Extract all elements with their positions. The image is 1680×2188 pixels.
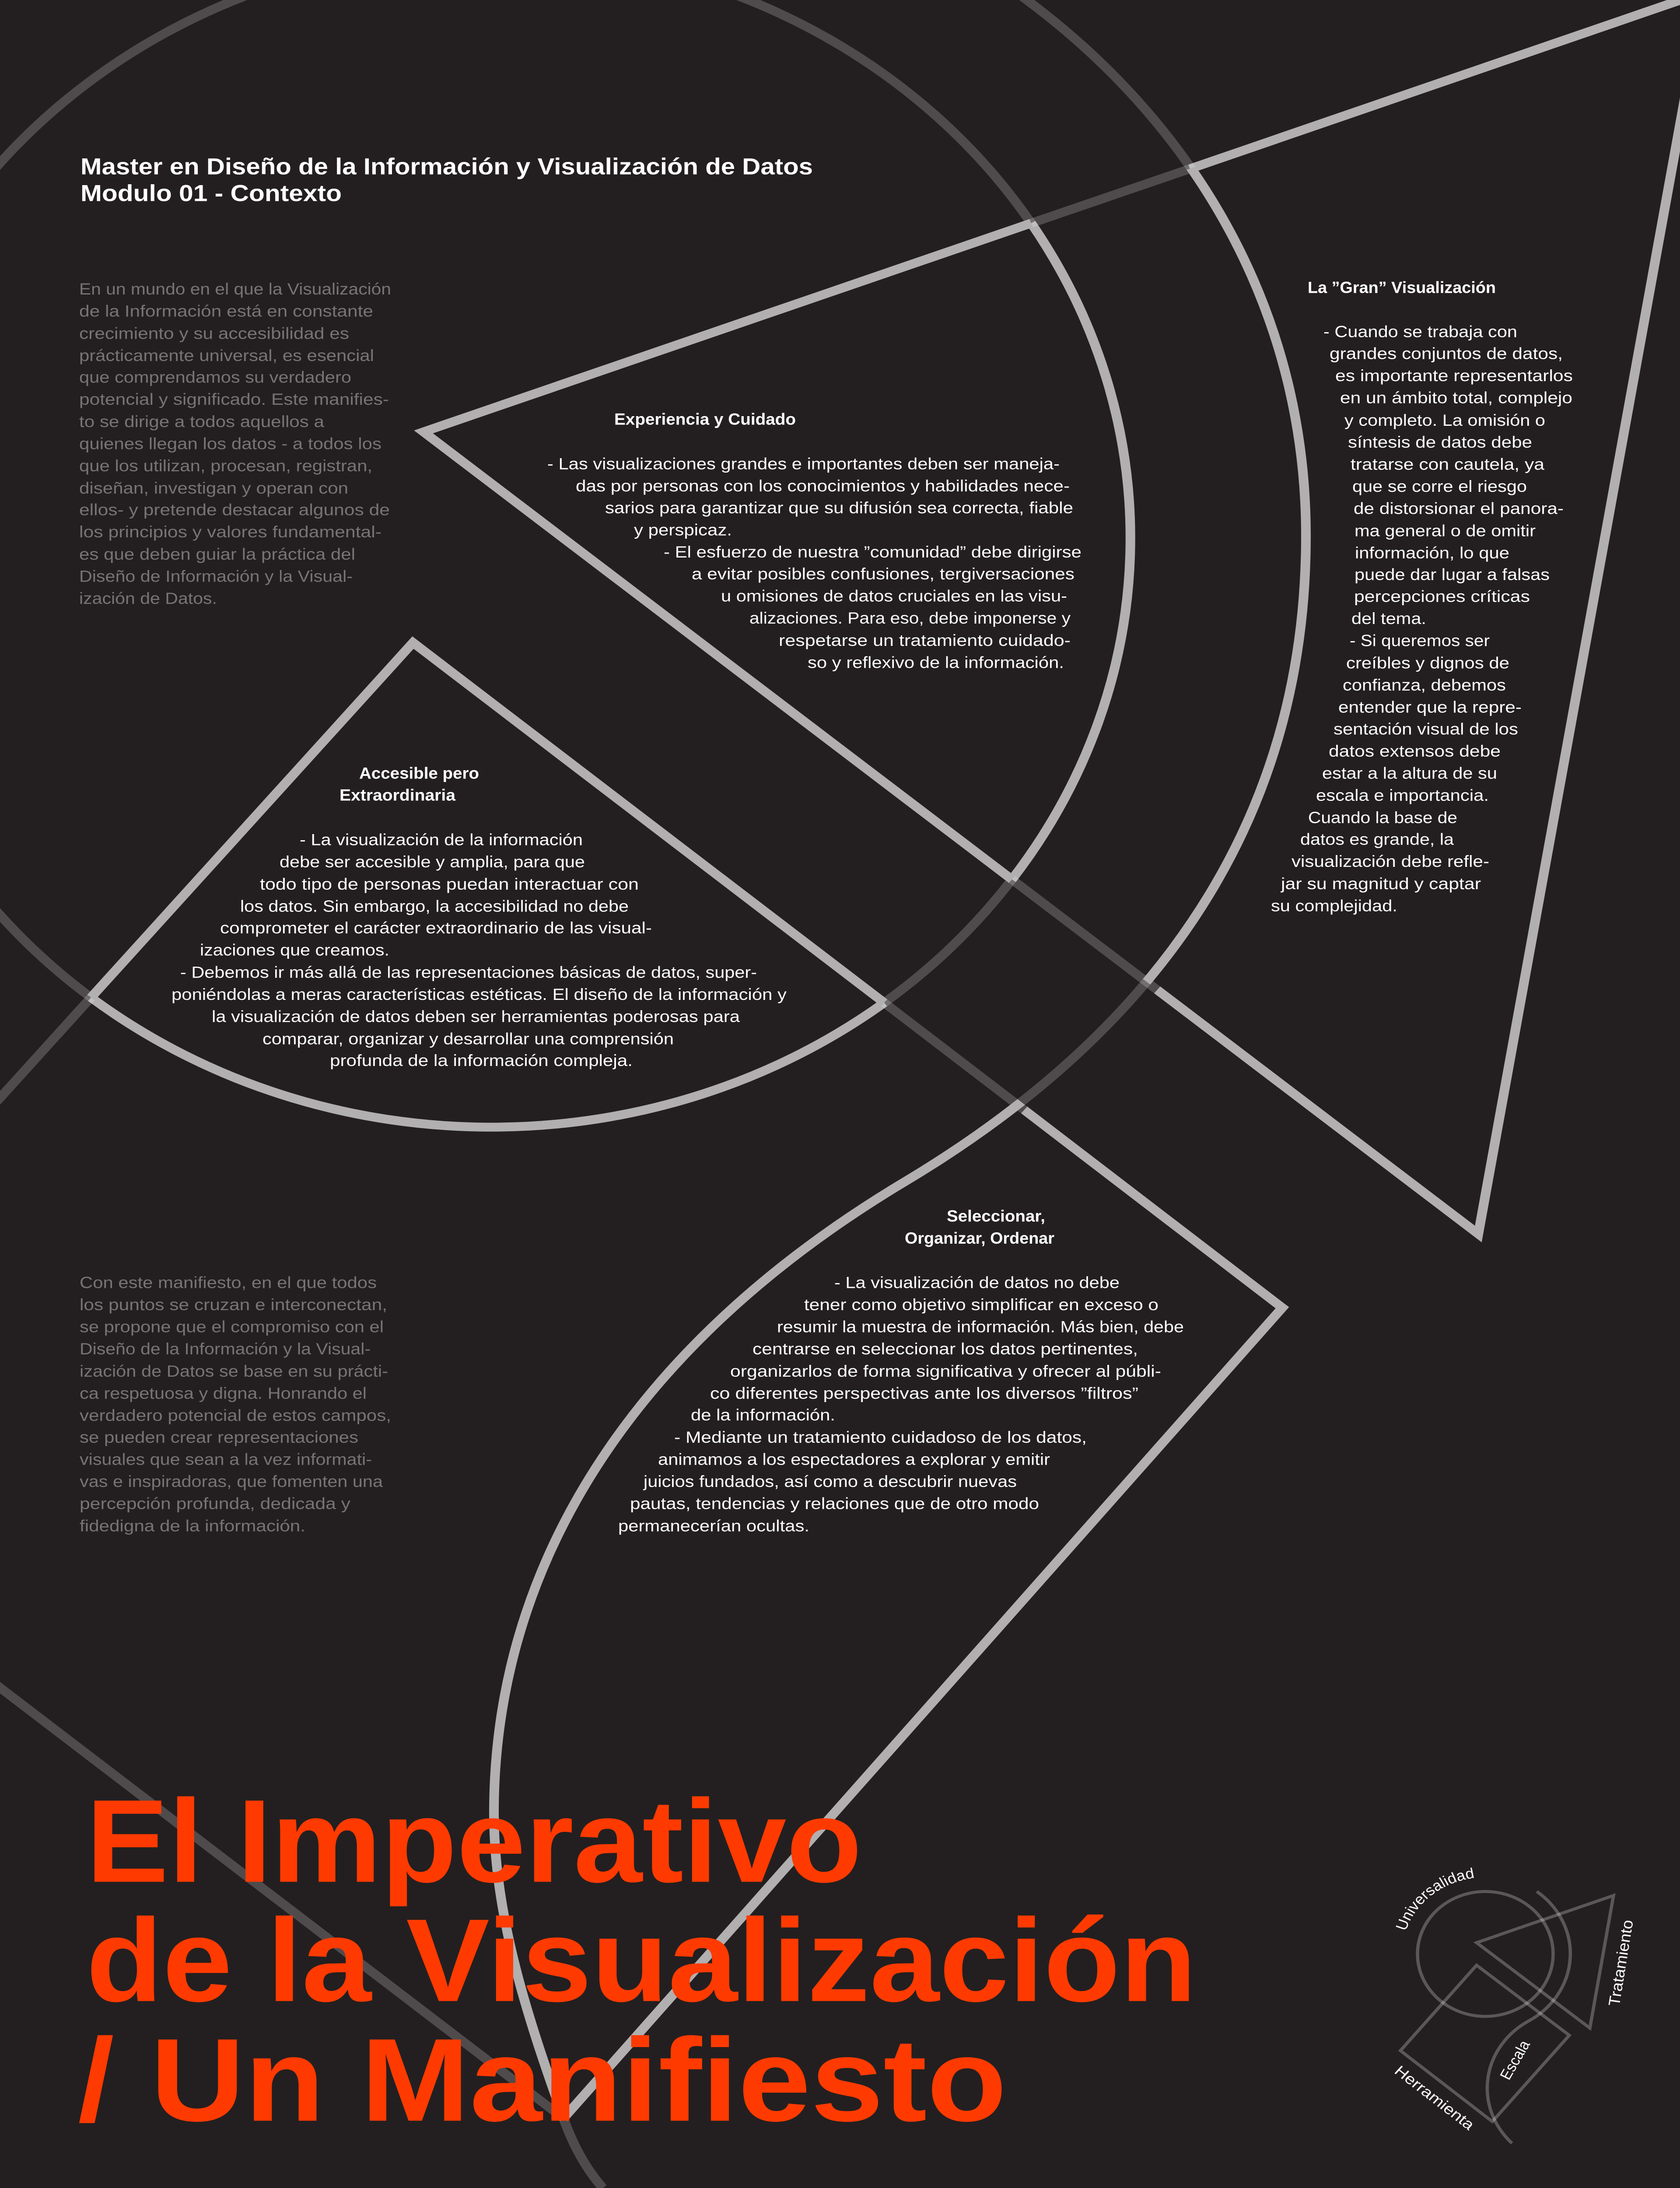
body text: La Gran Visualización: escala e importancia. (1316, 787, 1489, 805)
body text: La Gran Visualización: y completo. La omisión o (1344, 412, 1545, 430)
text block: conclusion: se propone que el compromiso con el (80, 1318, 384, 1336)
icon: small diagram of the four shapes with labels (1391, 1865, 1637, 2143)
text block: conclusion: ca respetuosa y digna. Honrando el (80, 1385, 367, 1403)
text block: introduction: ización de Datos. (79, 589, 217, 608)
body text: La Gran Visualización: de distorsionar el panora- (1354, 500, 1564, 518)
body text: Experiencia y Cuidado: alizaciones. Para eso, debe imponerse y (749, 610, 1071, 628)
body text: La Gran Visualización: percepciones críticas (1354, 588, 1530, 606)
heading: Seleccionar, Organizar, Ordenar: Seleccionar, (947, 1207, 1045, 1225)
body text: Experiencia y Cuidado: y perspicaz. (634, 521, 732, 539)
text block: introduction: que comprendamos su verdadero (79, 368, 351, 386)
text block: conclusion (80, 1274, 391, 1535)
heading: Accesible pero Extraordinaria: Extraordinaria (340, 786, 456, 804)
text block: conclusion: Diseño de la Información y la Visual- (80, 1340, 371, 1358)
body text: Experiencia y Cuidado: respetarse un tratamiento cuidado- (779, 631, 1071, 649)
body text: Accesible pero Extraordinaria: izaciones que creamos. (200, 941, 389, 959)
header: programme title (80, 154, 813, 206)
body text: Seleccionar, Organizar, Ordenar: resumir la muestra de información. Más bien, debe (777, 1318, 1184, 1336)
body text: La Gran Visualización: estar a la altura de su (1322, 764, 1497, 782)
title (78, 1775, 1197, 2146)
body text: La Gran Visualización: que se corre el riesgo (1352, 478, 1527, 496)
body text: Seleccionar, Organizar, Ordenar: - Mediante un tratamiento cuidadoso de los datos, (674, 1428, 1087, 1446)
body text: La Gran Visualización: es importante representarlos (1335, 367, 1573, 385)
header: programme title: Master en Diseño de la Información y Visualización de Datos (80, 154, 813, 179)
body text: La Gran Visualización: datos es grande, la (1300, 831, 1454, 849)
header: programme title: Modulo 01 - Contexto (80, 180, 342, 206)
text block: introduction: En un mundo en el que la Visualización (79, 280, 391, 298)
shape: large circle sector (0, 0, 1130, 1127)
heading: Accesible pero Extraordinaria: Accesible pero (359, 764, 479, 782)
text block: introduction: diseñan, investigan y operan con (79, 479, 348, 497)
icon shape: triangle (1477, 1896, 1614, 2028)
body text: Experiencia y Cuidado: u omisiones de datos cruciales en las visu- (721, 587, 1067, 605)
text block: conclusion: ización de Datos se base en su prácti- (80, 1362, 388, 1380)
text block: introduction: potencial y significado. Este manifies- (79, 391, 389, 409)
body text: La Gran Visualización: - Cuando se trabaja con (1323, 323, 1517, 341)
body text: Accesible pero Extraordinaria: los datos. Sin embargo, la accesibilidad no debe (240, 898, 629, 915)
shape: large square (0, 642, 1282, 2118)
body text: Seleccionar, Organizar, Ordenar: organizarlos de forma significativa y ofrecer al públi- (730, 1362, 1161, 1380)
icon shape: circle (1418, 1891, 1553, 2016)
body text: Seleccionar, Organizar, Ordenar: co diferentes perspectivas ante los diversos ”filtros” (710, 1385, 1138, 1403)
body text: Seleccionar, Organizar, Ordenar: tener como objetivo simplificar en exceso o (804, 1296, 1158, 1314)
panel: La Gran Visualización (1271, 279, 1573, 915)
title: El Imperativo (86, 1775, 862, 1907)
body text: La Gran Visualización: en un ámbito total, complejo (1340, 389, 1572, 407)
text block: introduction: que los utilizan, procesan, registran, (79, 457, 372, 475)
text block: introduction: quienes llegan los datos - a todos los (79, 435, 382, 453)
body text: Accesible pero Extraordinaria: - La visualización de la información (300, 831, 583, 849)
body text: Experiencia y Cuidado: so y reflexivo de la información. (808, 654, 1064, 672)
icon shape: square (1400, 1965, 1569, 2121)
body text: La Gran Visualización: del tema. (1351, 610, 1426, 628)
text block: conclusion: percepción profunda, dedicada y (80, 1495, 351, 1513)
text block: introduction: to se dirige a todos aquellos a (79, 413, 325, 431)
text block: introduction: de la Información está en constante (79, 302, 373, 320)
panel: Experiencia y Cuidado (547, 410, 1082, 672)
body text: Accesible pero Extraordinaria: - Debemos ir más allá de las representaciones básicas de datos, super- (180, 964, 757, 982)
label: Tratamiento: Tratamiento (1606, 1919, 1637, 2007)
body text: Accesible pero Extraordinaria: debe ser accesible y amplia, para que (280, 853, 585, 871)
body text: La Gran Visualización: grandes conjuntos de datos, (1330, 345, 1563, 363)
body text: Seleccionar, Organizar, Ordenar (618, 1274, 1184, 1535)
body text: La Gran Visualización: sentación visual de los (1334, 720, 1518, 738)
icon shape: S curve (1487, 1891, 1570, 2143)
text block: introduction: Diseño de Información y la Visual- (79, 568, 353, 586)
body text: Seleccionar, Organizar, Ordenar: centrarse en seleccionar los datos pertinentes, (752, 1340, 1138, 1358)
label: Escala: Escala (1497, 2037, 1534, 2083)
shape: large triangle (424, 0, 1680, 1234)
body text: Accesible pero Extraordinaria: profunda de la información compleja. (330, 1052, 633, 1070)
body text: La Gran Visualización: entender que la repre- (1338, 698, 1522, 716)
body text: Accesible pero Extraordinaria: comparar, organizar y desarrollar una comprensión (262, 1030, 674, 1048)
body text: Seleccionar, Organizar, Ordenar: juicios fundados, así como a descubrir nuevas (643, 1473, 1017, 1491)
text block: introduction (79, 280, 391, 608)
body text: Seleccionar, Organizar, Ordenar: animamos a los espectadores a explorar y emitir (658, 1451, 1050, 1469)
body text: La Gran Visualización: síntesis de datos debe (1348, 433, 1532, 451)
text block: conclusion: verdadero potencial de estos campos, (80, 1407, 391, 1425)
body text: Accesible pero Extraordinaria: comprometer el carácter extraordinario de las visual- (220, 919, 652, 937)
body text: Experiencia y Cuidado: sarios para garantizar que su difusión sea correcta, fiable (605, 499, 1073, 517)
body text: La Gran Visualización: puede dar lugar a falsas (1354, 566, 1550, 584)
label: Universalidad: Universalidad (1393, 1865, 1476, 1932)
text block: introduction: ellos- y pretende destacar algunos de (79, 501, 390, 519)
body text: La Gran Visualización: Cuando la base de (1308, 809, 1457, 827)
text block: introduction: crecimiento y su accesibilidad es (79, 325, 349, 343)
body text: Accesible pero Extraordinaria: todo tipo de personas puedan interactuar con (260, 875, 639, 893)
panel: Seleccionar, Organizar, Ordenar (618, 1207, 1184, 1535)
body text: Experiencia y Cuidado: - El esfuerzo de nuestra ”comunidad” debe dirigirse (664, 543, 1082, 561)
text block: introduction: los principios y valores fundamental- (79, 523, 382, 541)
heading: Seleccionar, Organizar, Ordenar: Organizar, Ordenar (905, 1229, 1054, 1248)
title: / Un Manifiesto (78, 2014, 1007, 2146)
body text: La Gran Visualización: visualización debe refle- (1292, 853, 1489, 871)
heading: Accesible pero Extraordinaria (340, 764, 479, 804)
panel: Accesible pero Extraordinaria (172, 764, 787, 1070)
text block: introduction: prácticamente universal, es esencial (79, 347, 374, 365)
text block: conclusion: vas e inspiradoras, que fomenten una (80, 1473, 383, 1491)
heading: La Gran Visualización: La ”Gran” Visualización (1308, 279, 1496, 297)
body text: La Gran Visualización: tratarse con cautela, ya (1351, 456, 1545, 473)
body text: La Gran Visualización: datos extensos debe (1329, 742, 1501, 761)
shape: large S curve (494, 0, 1306, 2188)
body text: La Gran Visualización (1271, 323, 1573, 915)
body text: La Gran Visualización: creíbles y dignos de (1346, 654, 1509, 672)
text block: conclusion: los puntos se cruzan e interconectan, (80, 1296, 387, 1314)
title: de la Visualización (86, 1894, 1197, 2026)
heading: Seleccionar, Organizar, Ordenar (905, 1207, 1054, 1248)
body text: Experiencia y Cuidado: das por personas con los conocimientos y habilidades nece- (576, 477, 1070, 495)
body text: Accesible pero Extraordinaria: la visualización de datos deben ser herramientas poderosas para (212, 1008, 740, 1026)
label: Herramienta: Herramienta (1391, 2063, 1478, 2133)
text block: introduction: es que deben guiar la práctica del (79, 545, 355, 563)
text block: conclusion: fidedigna de la información. (80, 1517, 305, 1535)
body text: La Gran Visualización: - Si queremos ser (1350, 632, 1490, 650)
body text: Experiencia y Cuidado (547, 455, 1082, 672)
body text: La Gran Visualización: jar su magnitud y captar (1281, 875, 1481, 893)
heading: Experiencia y Cuidado: Experiencia y Cuidado (614, 410, 796, 428)
body text: Experiencia y Cuidado: a evitar posibles confusiones, tergiversaciones (692, 565, 1074, 583)
body text: La Gran Visualización: confianza, debemos (1343, 676, 1506, 694)
body text: La Gran Visualización: información, lo que (1355, 544, 1509, 562)
body text: La Gran Visualización: su complejidad. (1271, 897, 1397, 915)
text block: conclusion: visuales que sean a la vez informati- (80, 1451, 372, 1469)
body text: Accesible pero Extraordinaria: poniéndolas a meras características estéticas. El diseño de la información y (172, 985, 787, 1004)
text block: conclusion: se pueden crear representaciones (80, 1428, 358, 1446)
body text: Experiencia y Cuidado: - Las visualizaciones grandes e importantes deben ser maneja- (547, 455, 1060, 473)
body text: Accesible pero Extraordinaria (172, 831, 787, 1070)
text block: conclusion: Con este manifiesto, en el que todos (80, 1274, 377, 1292)
body text: La Gran Visualización: ma general o de omitir (1354, 522, 1536, 540)
body text: Seleccionar, Organizar, Ordenar: - La visualización de datos no debe (834, 1274, 1120, 1292)
body text: Seleccionar, Organizar, Ordenar: pautas, tendencias y relaciones que de otro modo (630, 1495, 1039, 1513)
body text: Seleccionar, Organizar, Ordenar: permanecerían ocultas. (618, 1517, 809, 1535)
body text: Seleccionar, Organizar, Ordenar: de la información. (691, 1406, 835, 1424)
